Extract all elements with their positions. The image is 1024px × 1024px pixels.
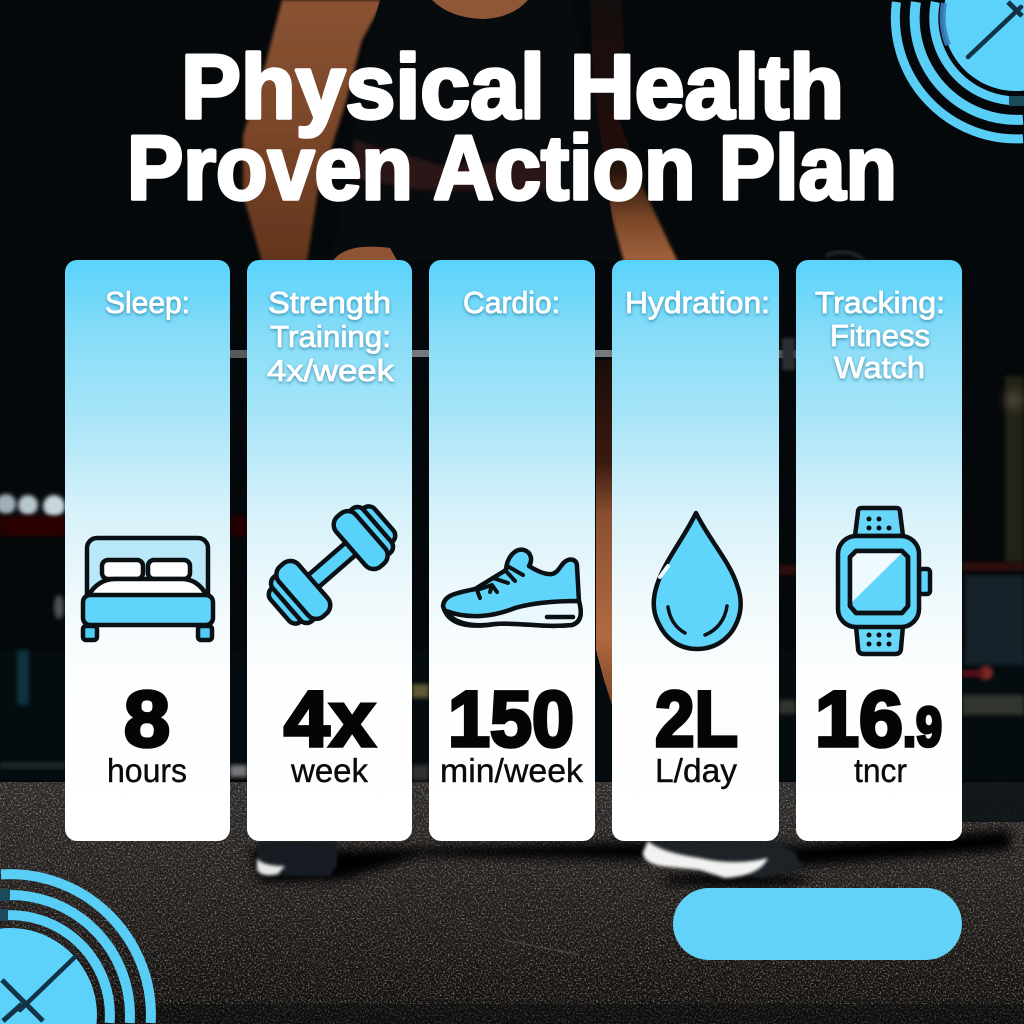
- label: strength training: Strength: [268, 285, 391, 320]
- label: strength training: 4x/week: [267, 353, 395, 388]
- unit: week: week: [290, 752, 368, 789]
- left shoe: [257, 841, 338, 876]
- label: tracking: Watch: [834, 350, 925, 385]
- unit: hours: hours: [107, 752, 187, 789]
- unit: L/day: L/day: [655, 752, 738, 789]
- title: Physical Health: [181, 37, 844, 138]
- panel: tracking: [796, 260, 962, 841]
- panel: hydration: [612, 260, 779, 841]
- athlete body: [243, 0, 678, 705]
- icon: running shoe: [443, 550, 581, 626]
- icon: dumbbell: [258, 495, 406, 635]
- unit: tncr: tncr: [854, 752, 907, 789]
- panel: cardio: [429, 260, 595, 841]
- label: tracking: [815, 285, 945, 385]
- shoe shadow on the floor: [250, 830, 1010, 886]
- label: strength training: [267, 285, 395, 388]
- background lights and gym equipment: [0, 376, 1024, 780]
- clock badge: bottom left: [0, 874, 151, 1024]
- panel: strength training: [247, 260, 412, 841]
- label: tracking: Tracking:: [815, 285, 945, 320]
- icon: water drop: [654, 513, 741, 649]
- label: strength training: Training:: [270, 319, 391, 354]
- label: hydration: Hydration:: [625, 285, 770, 320]
- label: sleep: Sleep:: [105, 285, 190, 320]
- value: 150: 150: [448, 674, 574, 763]
- right shoe: [643, 841, 803, 878]
- panel: sleep: [65, 260, 230, 841]
- blank call-to-action pill: [673, 888, 962, 960]
- value: 2L: 2L: [655, 674, 738, 763]
- icon: bed: [83, 538, 213, 640]
- barbell: [230, 252, 864, 370]
- clock badge: top right: [895, 0, 1024, 139]
- value: 16.9: 16.9: [815, 674, 942, 763]
- title: Proven Action Plan: [127, 118, 897, 219]
- floor: [0, 782, 1024, 1024]
- label: tracking: Fitness: [830, 318, 930, 353]
- value: 8: 8: [124, 674, 170, 763]
- unit: min/week: min/week: [440, 752, 584, 789]
- label: cardio: Cardio:: [463, 285, 560, 320]
- value: 4x: 4x: [284, 674, 375, 763]
- icon: fitness watch: [838, 508, 930, 654]
- title: [127, 37, 897, 219]
